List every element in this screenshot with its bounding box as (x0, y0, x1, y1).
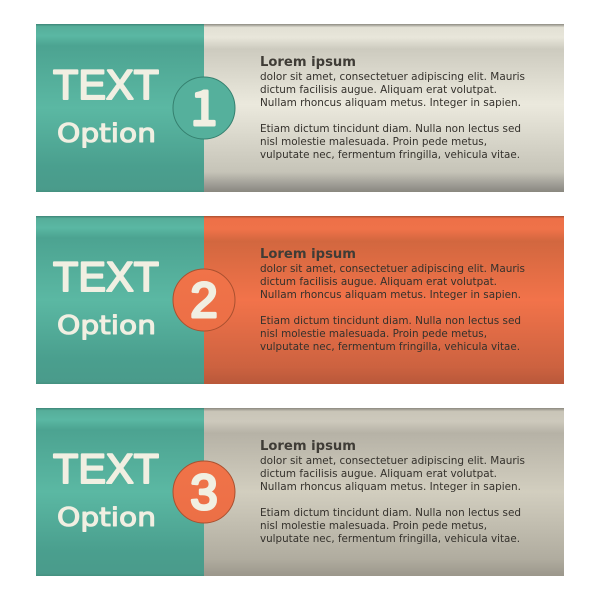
text block 2: dolor sit amet, consectetuer adipiscing elit. Mauris (260, 262, 525, 275)
content block 2 (204, 216, 564, 384)
text block 2: vulputate nec, fermentum fringilla, vehicula vitae. (260, 340, 520, 353)
subheading: Option 3: Option (57, 503, 156, 533)
number badge 2 (173, 269, 235, 331)
text block 3: dolor sit amet, consectetuer adipiscing elit. Mauris (260, 454, 525, 467)
text block 2: Etiam dictum tincidunt diam. Nulla non lectus sed (260, 314, 521, 327)
number badge 3 (173, 461, 235, 523)
panel: option 2 (36, 216, 564, 384)
teal label block 1 (36, 24, 204, 192)
text block 3: dictum facilisis augue. Aliquam erat volutpat. (260, 467, 497, 480)
subheading: Option 2: Option (57, 311, 156, 341)
text block 3: Nullam rhoncus aliquam metus. Integer in sapien. (260, 480, 521, 493)
panel: option 1 (36, 24, 564, 192)
content block 3 (204, 408, 564, 576)
text block 2: Lorem ipsum (260, 246, 356, 262)
text block 3 (260, 438, 525, 545)
text block 3: vulputate nec, fermentum fringilla, vehicula vitae. (260, 532, 520, 545)
text block 2: Nullam rhoncus aliquam metus. Integer in sapien. (260, 288, 521, 301)
text block 1: nisl molestie malesuada. Proin pede metus, (260, 135, 487, 148)
text block 1 (260, 54, 525, 161)
panel: option 3 (36, 408, 564, 576)
teal label block 3 (36, 408, 204, 576)
teal label block 2 (36, 216, 204, 384)
text block 1: Nullam rhoncus aliquam metus. Integer in sapien. (260, 96, 521, 109)
text block 2: nisl molestie malesuada. Proin pede metus, (260, 327, 487, 340)
text block 2 (260, 246, 525, 353)
text block 3: Lorem ipsum (260, 438, 356, 454)
text block 1: dolor sit amet, consectetuer adipiscing elit. Mauris (260, 70, 525, 83)
text block 3: Etiam dictum tincidunt diam. Nulla non lectus sed (260, 506, 521, 519)
text block 2: dictum facilisis augue. Aliquam erat volutpat. (260, 275, 497, 288)
number badge 1 (173, 69, 235, 139)
text block 1: vulputate nec, fermentum fringilla, vehicula vitae. (260, 148, 520, 161)
text block 1: Etiam dictum tincidunt diam. Nulla non lectus sed (260, 122, 521, 135)
number badge 1: 1 (191, 69, 217, 139)
heading: TEXT 3: TEXT (53, 445, 159, 492)
text block 1: Lorem ipsum (260, 54, 356, 70)
content block 1 (204, 24, 564, 192)
heading: TEXT 1: TEXT (53, 61, 159, 108)
subheading: Option 1: Option (57, 119, 156, 149)
number badge 2: 2 (190, 274, 218, 328)
text block 3: nisl molestie malesuada. Proin pede metus, (260, 519, 487, 532)
number badge 3: 3 (190, 466, 218, 520)
heading: TEXT 2: TEXT (53, 253, 159, 300)
text block 1: dictum facilisis augue. Aliquam erat volutpat. (260, 83, 497, 96)
